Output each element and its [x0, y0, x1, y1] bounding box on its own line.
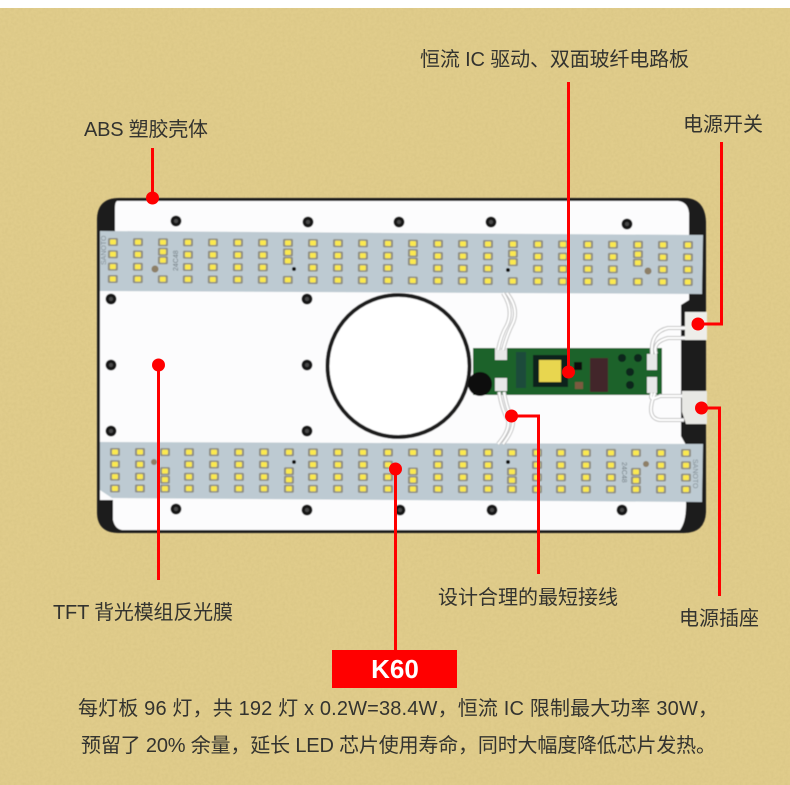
power socket connector — [682, 391, 707, 424]
callout: power switch: 电源开关 — [683, 113, 763, 136]
upper LED strip: 24C48 — [173, 250, 180, 271]
callout: power socket: 电源插座 — [679, 607, 759, 630]
lower LED strip — [100, 442, 703, 502]
upper LED strip: SANOTO — [101, 235, 108, 265]
round centre window — [328, 295, 470, 437]
wire shadows — [498, 293, 686, 444]
panel housing — [97, 198, 706, 533]
callout: reflective film: TFT 背光模组反光膜 — [53, 601, 233, 624]
callout: power switch — [683, 113, 763, 330]
white wires — [498, 293, 686, 444]
callout: shortest wiring: 设计合理的最短接线 — [438, 586, 618, 609]
lower LED strip: 24C48 — [620, 462, 627, 483]
callout: reflective film — [53, 358, 233, 624]
white reflective film — [100, 201, 689, 530]
description text: 每灯板 96 灯，共 192 灯 x 0.2W=38.4W，恒流 IC 限制最大功率 30W， — [78, 697, 718, 720]
model label K60: K60 — [371, 654, 419, 684]
lower LED strip: SANOTO — [691, 459, 698, 489]
callout: shortest wiring — [438, 410, 618, 609]
mounting screws — [106, 216, 632, 515]
product: LED panel — [97, 198, 707, 533]
description text — [78, 697, 718, 757]
callout: power socket — [679, 402, 759, 630]
model label K60 — [332, 462, 457, 688]
callout: driver board — [420, 48, 689, 378]
power switch connector — [685, 312, 707, 340]
description text: 预留了 20% 余量，延长 LED 芯片使用寿命，同时大幅度降低芯片发热。 — [81, 734, 716, 757]
driver circuit board — [468, 348, 662, 396]
callout: driver board: 恒流 IC 驱动、双面玻纤电路板 — [420, 48, 689, 71]
callout: ABS housing: ABS 塑胶壳体 — [84, 118, 208, 141]
callout: ABS housing — [84, 118, 208, 204]
upper LED strip — [100, 231, 703, 294]
